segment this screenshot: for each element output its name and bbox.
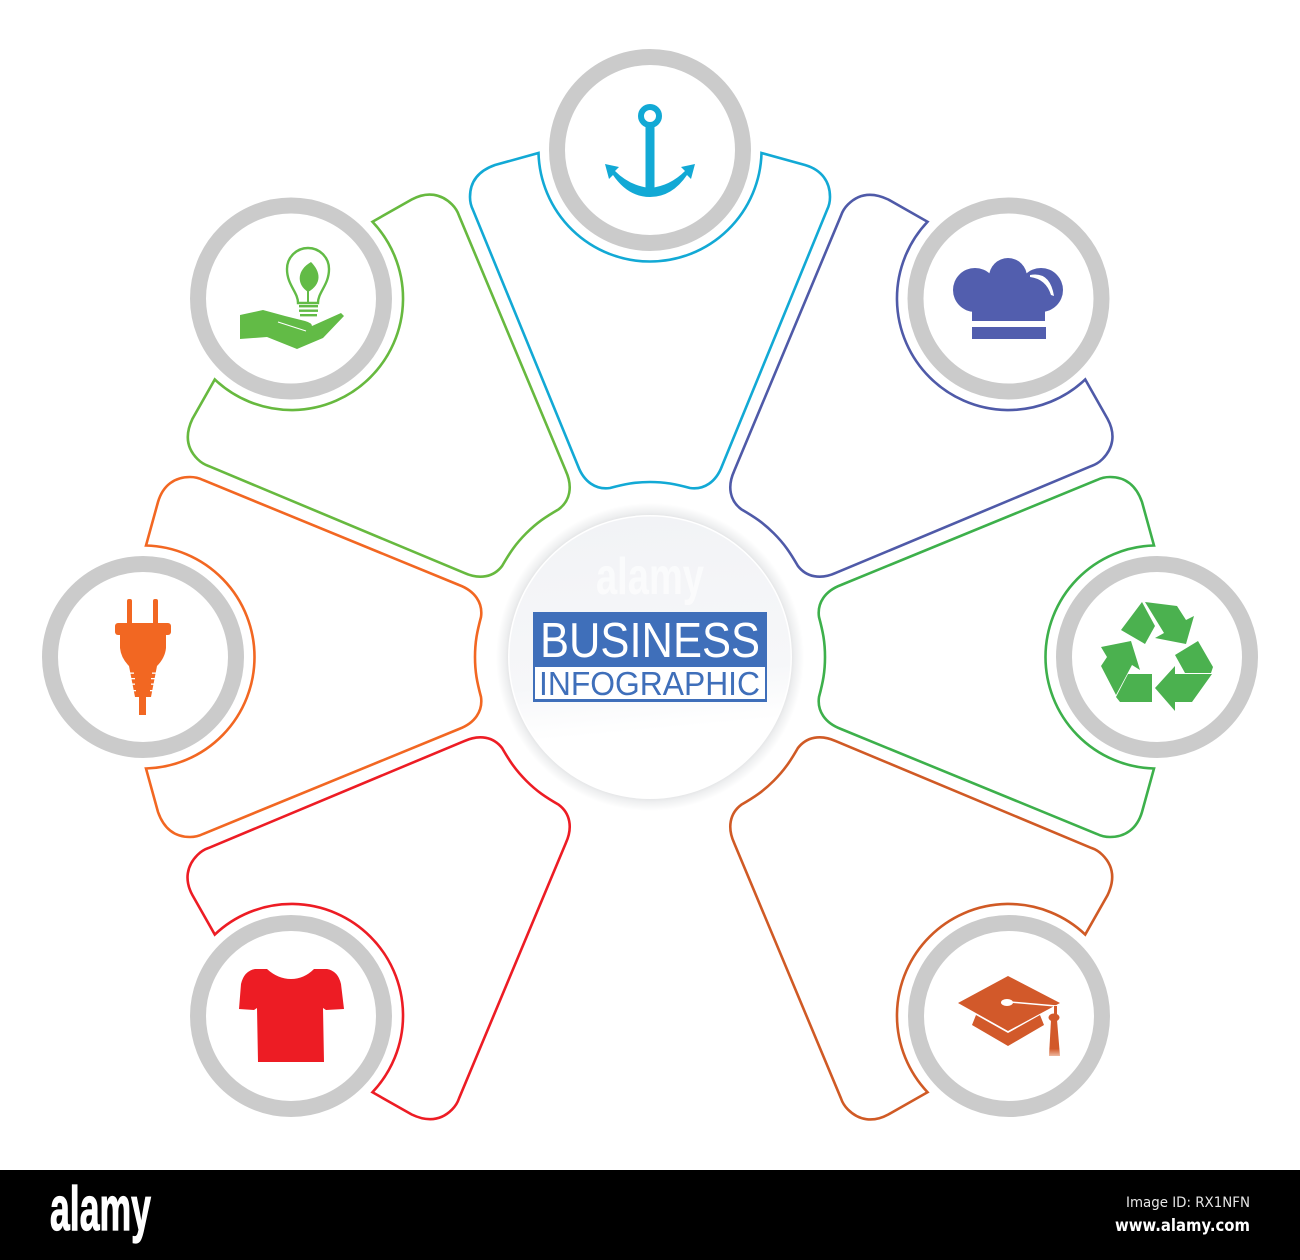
title block (533, 612, 767, 702)
ring: anchor (557, 57, 743, 243)
image id: Image ID: RX1NFN (1126, 1195, 1250, 1211)
segment: graduation cap (642, 649, 1134, 1141)
outline: t-shirt segment (166, 649, 658, 1141)
outline: recycle segment (819, 477, 1154, 837)
icon: graduation cap (958, 976, 1060, 1056)
icon: recycle (1101, 602, 1213, 711)
outline: graduation cap segment (642, 649, 1134, 1141)
segment: t-shirt (166, 649, 658, 1141)
subtitle: infographic: INFOGRAPHIC (539, 665, 760, 702)
ring: t-shirt (198, 923, 384, 1109)
ring: green energy (198, 206, 384, 392)
segment: anchor (470, 57, 830, 488)
segment: recycle (819, 477, 1250, 837)
segment: chef hat (642, 173, 1134, 665)
footer bar (0, 1170, 1300, 1260)
outline: chef hat segment (642, 173, 1134, 665)
outline: plug segment (146, 477, 481, 837)
center disc (496, 503, 804, 811)
icon: chef hat (953, 258, 1063, 339)
segment: green energy (166, 173, 658, 665)
ring: chef hat (916, 206, 1102, 392)
watermark: alamy (596, 548, 704, 606)
ring: graduation cap (916, 923, 1102, 1109)
icon: plug (115, 599, 171, 715)
icon: hand with light bulb (240, 248, 344, 349)
icon: anchor (605, 107, 695, 197)
website: www.alamy.com (1115, 1216, 1250, 1236)
ring: plug (50, 564, 236, 750)
icon: t-shirt (239, 969, 344, 1062)
ring: recycle (1064, 564, 1250, 750)
title: business: BUSINESS (540, 614, 760, 668)
outline: green energy segment (166, 173, 658, 665)
outline: anchor segment (470, 153, 830, 488)
segment: plug (50, 477, 481, 837)
footer logo: alamy (50, 1175, 151, 1244)
